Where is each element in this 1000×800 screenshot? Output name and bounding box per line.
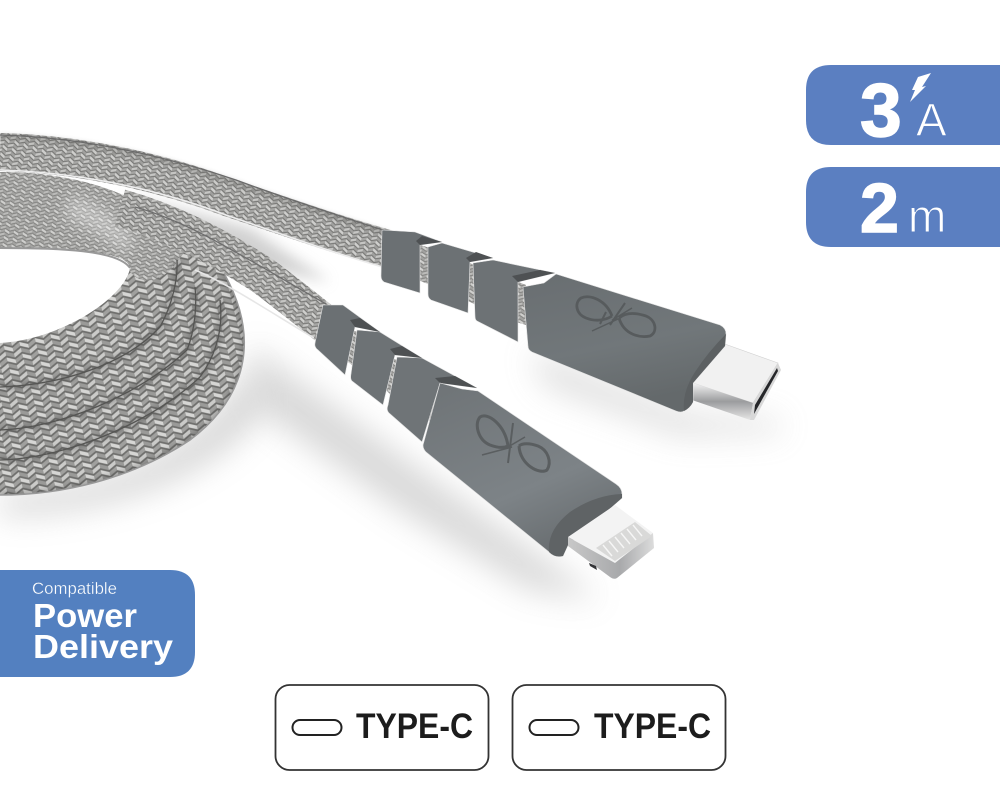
coil upper fine braid <box>0 172 190 281</box>
unit m: m <box>908 190 946 242</box>
USB-C port opening <box>750 363 781 420</box>
USB-C metal plug <box>692 343 781 420</box>
type-c label 1 <box>276 685 488 770</box>
type-c text 1: TYPE-C <box>356 707 473 746</box>
port icon 1 <box>292 720 342 735</box>
USB-C body end shade <box>684 334 726 411</box>
coil edge line <box>0 275 244 495</box>
coil centre hole <box>0 248 130 343</box>
coil grooves <box>0 260 244 495</box>
USB-C exposed braid between segments <box>417 244 526 325</box>
Lightning notch shadows <box>350 318 477 388</box>
type-c label 2 <box>512 685 726 770</box>
coil body <box>0 172 244 495</box>
type-c text 2: TYPE-C <box>594 707 711 746</box>
badge: 2m length <box>806 167 1000 247</box>
Lightning body end face <box>549 494 622 556</box>
USB-C moulded segment 1 <box>381 230 442 293</box>
unit A: A <box>916 94 947 146</box>
Lightning connector <box>315 305 654 579</box>
lightning icon <box>910 73 931 102</box>
Lightning side notch <box>589 563 597 570</box>
coil highlight <box>65 195 135 255</box>
lower braided cable strand <box>120 207 330 338</box>
Lightning infinity logo <box>477 416 549 471</box>
USB-C connector <box>381 230 781 420</box>
USB-C moulded segment 2 <box>428 243 493 313</box>
braided cable coil <box>0 172 244 495</box>
badge: Power Delivery <box>0 570 195 677</box>
USB-C notch shadows <box>416 236 555 282</box>
number 3: 3 <box>860 68 902 152</box>
port icon 2 <box>530 720 578 735</box>
soft drop shadows <box>0 192 780 600</box>
Lightning exposed braid between segments <box>345 330 455 425</box>
Lightning contact pad <box>596 522 652 561</box>
number 2: 2 <box>860 169 899 247</box>
Lightning moulded segment 1 <box>315 305 380 375</box>
compatible label: Compatible <box>32 580 117 598</box>
USB-C moulded segment 3 <box>473 260 555 342</box>
Lightning metal plug <box>568 505 654 579</box>
USB-C overmould body <box>523 274 726 412</box>
USB-C infinity logo <box>577 297 655 337</box>
delivery text: Delivery <box>33 628 174 665</box>
upper braided cable strand <box>0 135 392 268</box>
power text: Power <box>33 597 137 634</box>
Lightning moulded segment 2 <box>351 330 422 405</box>
Lightning moulded segment 3 <box>387 357 477 442</box>
Lightning overmould body <box>423 383 622 556</box>
badge: 3A current <box>806 65 1000 152</box>
